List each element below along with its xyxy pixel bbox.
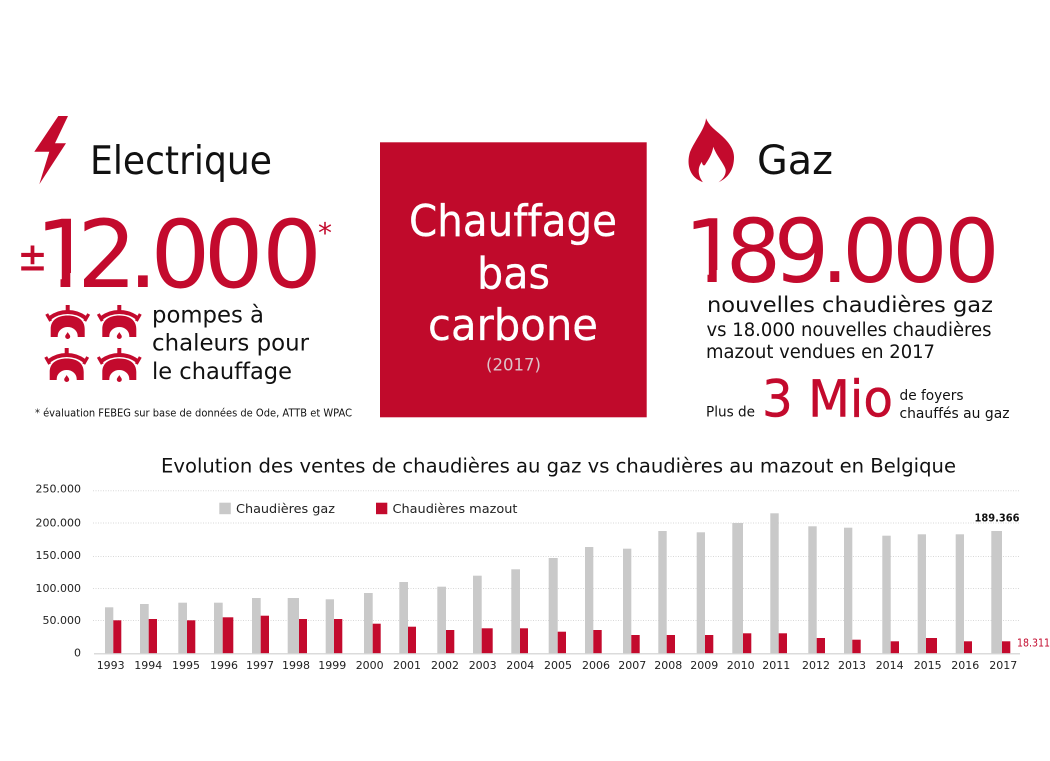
- x axis labels: 2005: [544, 659, 572, 672]
- panel: chauffage bas carbone: [380, 142, 647, 417]
- text: de foyers chauffés au gaz: de foyers: [900, 388, 964, 404]
- text: de foyers chauffés au gaz: [900, 388, 1010, 422]
- stat: plus or minus 12.000: *: [318, 217, 332, 250]
- text: de foyers chauffés au gaz: chauffés au gaz: [900, 406, 1010, 422]
- red square: [380, 142, 647, 417]
- gas bars: [105, 513, 1002, 653]
- x axis labels: [97, 659, 1017, 672]
- stat: 189.000: 1: [684, 201, 739, 303]
- legend: [219, 501, 518, 516]
- text: pompes à chaleurs pour le chauffage: le chauffage: [152, 359, 292, 385]
- stat: plus de 3 Mio: Plus de: [706, 405, 755, 421]
- x axis labels: 2013: [838, 659, 866, 672]
- x axis labels: 2017: [989, 659, 1017, 672]
- stat: plus or minus 12.000: 2.000: [77, 201, 322, 310]
- panel: electrique: [18, 116, 352, 420]
- x axis labels: 2004: [506, 659, 534, 672]
- mazout bars: [113, 616, 1010, 653]
- text: nouvelles chaudières gaz: nouvelles chaudières gaz: [707, 293, 993, 317]
- text: vs 18.000 mazout: vs 18.000 nouvelles chaudières: [706, 320, 992, 341]
- x axis labels: 2008: [654, 659, 682, 672]
- x axis labels: 1996: [210, 659, 238, 672]
- x axis labels: 1995: [172, 659, 200, 672]
- title: Chauffage bas carbone: bas: [477, 248, 550, 299]
- icon: flame: [689, 118, 734, 182]
- x axis labels: 2007: [618, 659, 646, 672]
- text: pompes à chaleurs pour le chauffage: chaleurs pour: [152, 330, 310, 356]
- x axis labels: 2003: [469, 659, 497, 672]
- value label: gas 2017: 189.366: [974, 512, 1020, 525]
- x axis labels: 2010: [727, 659, 755, 672]
- stat: 189.000: 89.000: [726, 201, 1000, 303]
- chart title: Evolution des ventes de chaudières au gaz vs chaudières au mazout en Belgique: [161, 455, 956, 478]
- y axis labels: 50.000: [42, 614, 81, 627]
- x axis labels: 2012: [802, 659, 830, 672]
- heading: Gaz: Gaz: [757, 138, 833, 184]
- text: pompes à chaleurs pour le chauffage: [152, 302, 310, 385]
- y axis labels: 0: [74, 647, 81, 660]
- legend: Chaudières mazout: [392, 501, 518, 516]
- stat: plus de 3 Mio: [706, 371, 893, 430]
- x axis labels: 1993: [97, 659, 125, 672]
- title: Chauffage bas carbone: carbone: [428, 300, 598, 351]
- title: Chauffage bas carbone: [409, 196, 617, 351]
- x axis labels: 2016: [951, 659, 979, 672]
- legend: Chaudières gaz: [236, 501, 335, 516]
- x axis labels: 1997: [246, 659, 274, 672]
- x axis labels: 2015: [914, 659, 942, 672]
- y axis labels: 150.000: [36, 549, 81, 562]
- y axis labels: 100.000: [36, 582, 81, 595]
- y axis labels: 200.000: [36, 517, 81, 530]
- title: Chauffage bas carbone: Chauffage: [409, 196, 617, 247]
- stat: plus or minus 12.000: ±: [18, 235, 47, 279]
- y axis labels: 250.000: [36, 483, 81, 496]
- x axis labels: 1994: [134, 659, 162, 672]
- x axis labels: 2001: [393, 659, 421, 672]
- x axis labels: 2009: [690, 659, 718, 672]
- text: pompes à chaleurs pour le chauffage: pompes à: [152, 302, 264, 328]
- x axis labels: 2011: [762, 659, 790, 672]
- x axis labels: 2002: [431, 659, 459, 672]
- heading: Electrique: Electrique: [90, 139, 272, 184]
- x axis labels: 2006: [582, 659, 610, 672]
- text: vs 18.000 mazout: mazout vendues en 2017: [706, 342, 935, 363]
- text: vs 18.000 mazout: [706, 320, 992, 363]
- x axis labels: 1998: [282, 659, 310, 672]
- footnote: * évaluation FEBEG sur base de données de Ode, ATTB et WPAC: [35, 408, 352, 420]
- x axis labels: 2000: [356, 659, 384, 672]
- x axis labels: 1999: [318, 659, 346, 672]
- panel: gaz: [684, 118, 1010, 430]
- icon: heat pumps: [46, 305, 140, 382]
- icon: lightning bolt: [34, 116, 68, 184]
- stat: plus de 3 Mio: 3 Mio: [762, 371, 893, 430]
- y axis labels: [36, 483, 81, 660]
- bar chart: ventes de chaudières: [36, 483, 1050, 672]
- x axis labels: 2014: [876, 659, 904, 672]
- stat: plus or minus 12.000: 1: [35, 201, 95, 310]
- year: (2017): [486, 356, 541, 376]
